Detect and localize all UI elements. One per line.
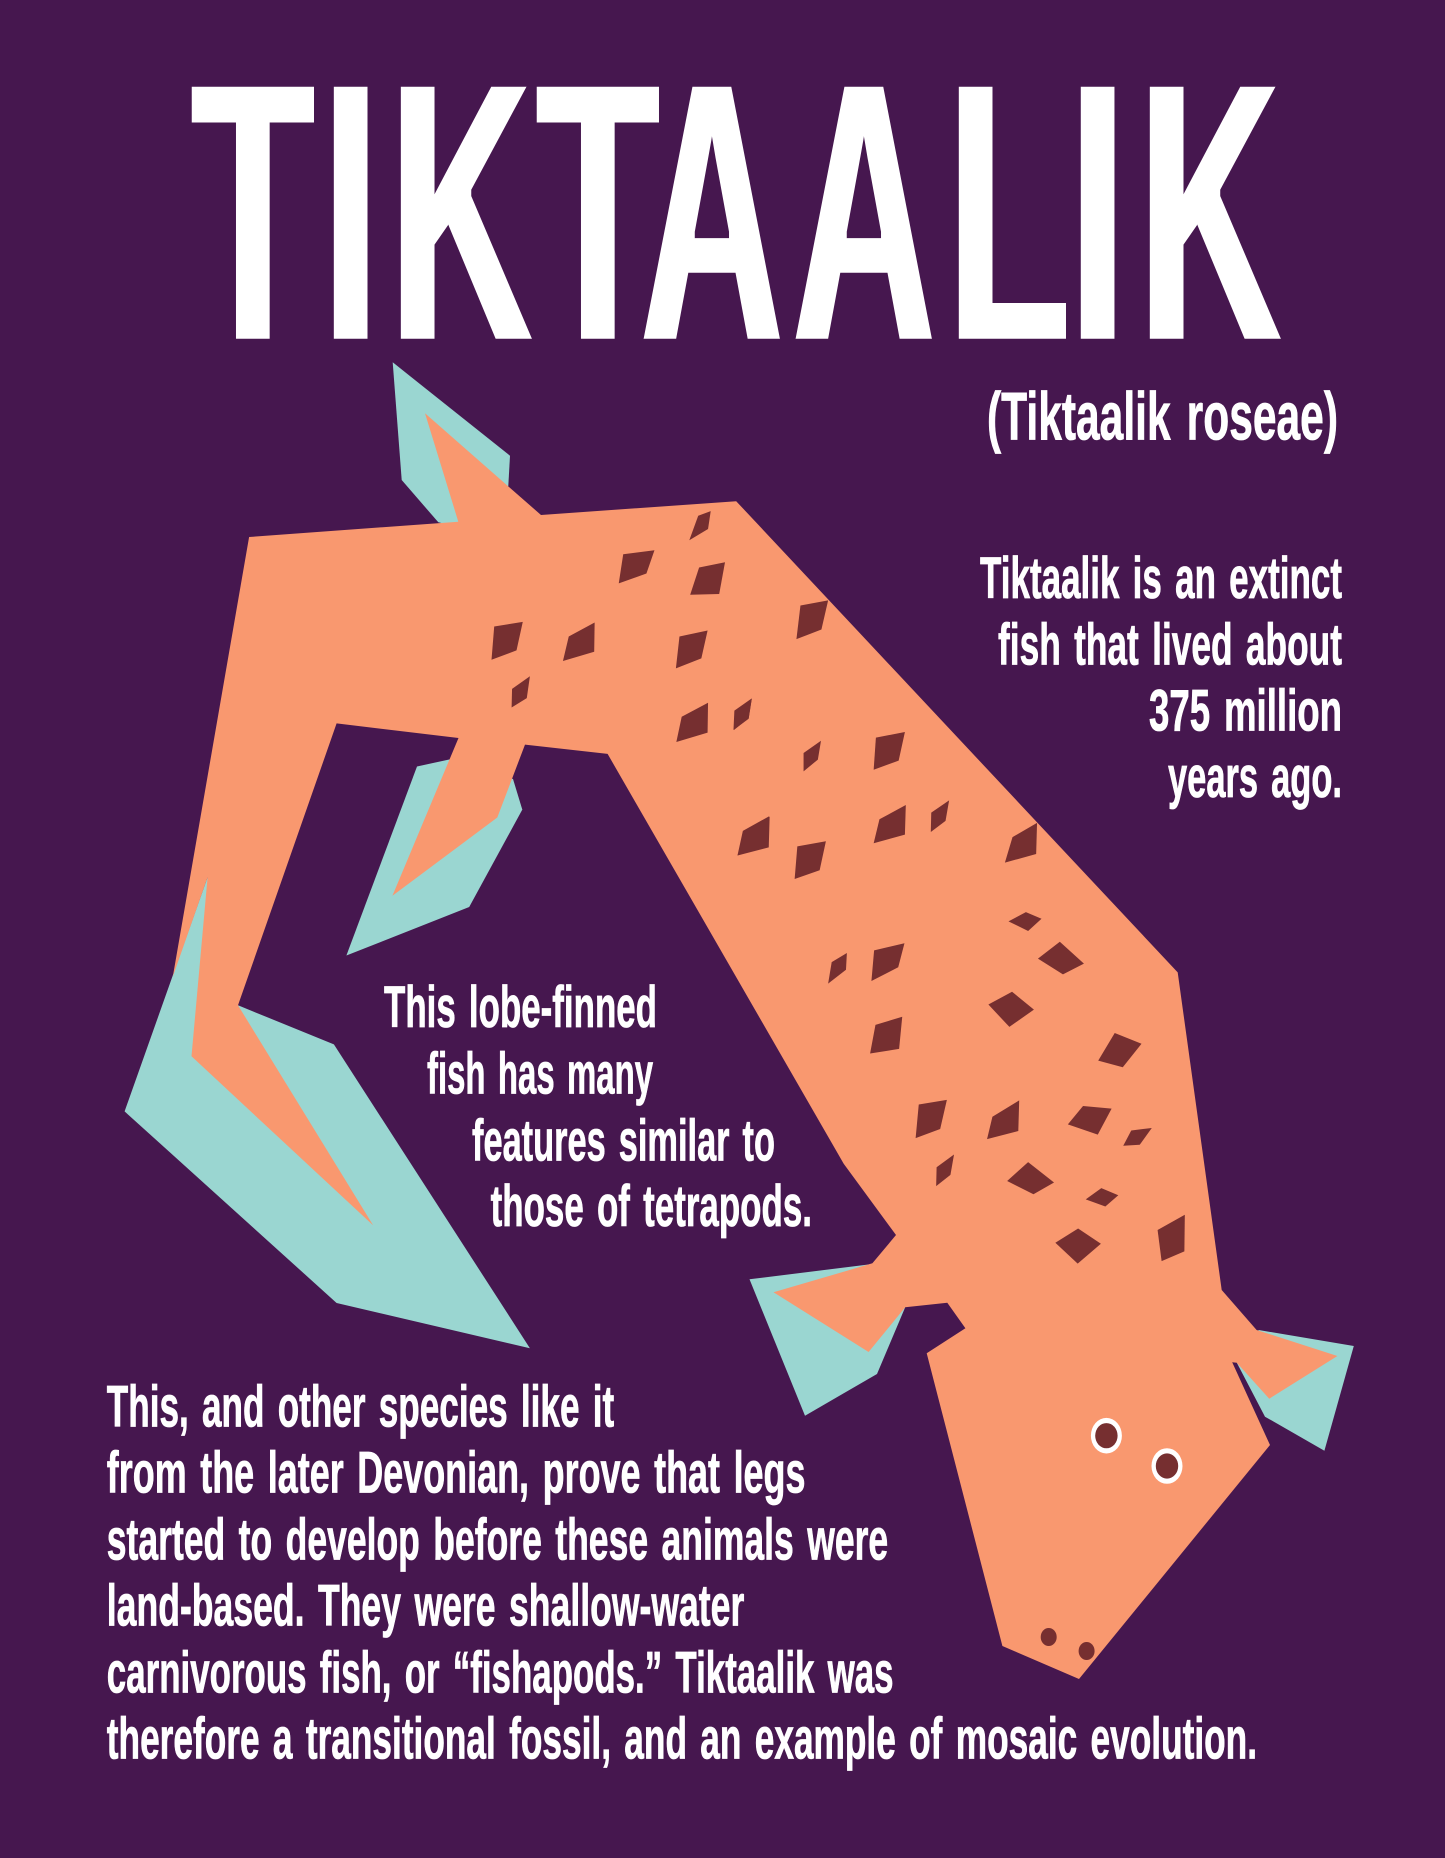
- text block: evolution: started to develop before these animals were: [107, 1507, 888, 1572]
- fin: hind foot: [125, 877, 530, 1348]
- icon: left nostril: [1041, 1628, 1057, 1646]
- text block: lobe-finned: [384, 975, 812, 1239]
- icon: right eye: [1152, 1448, 1182, 1484]
- text block: evolution: This, and other species like it: [107, 1375, 614, 1440]
- icon: left eye: [1091, 1418, 1122, 1453]
- fin: front left: [750, 1264, 905, 1416]
- title: TIKTAALIK: [192, 2, 1283, 422]
- fin: rear lower: [346, 759, 522, 956]
- fin: front right: [1237, 1330, 1354, 1451]
- text block: intro: [980, 546, 1342, 810]
- illustration: tiktaalik: [125, 362, 1354, 1679]
- text block: lobe-finned: those of tetrapods.: [491, 1174, 812, 1239]
- text block: lobe-finned: This lobe-finned: [384, 975, 657, 1040]
- text block: evolution: from the later Devonian, prove that legs: [107, 1441, 806, 1506]
- spots: lower body: [733, 600, 1185, 1264]
- fin: upper back: [393, 362, 510, 530]
- icon: right nostril: [1079, 1642, 1095, 1660]
- text block: evolution: [107, 1375, 1257, 1772]
- text block: evolution: land-based. They were shallow-water: [107, 1574, 744, 1639]
- body: [173, 413, 1337, 1679]
- text block: lobe-finned: fish has many: [427, 1042, 653, 1106]
- text block: evolution: carnivorous fish, or “fishapods.” Tiktaalik was: [107, 1640, 894, 1705]
- spots: upper body: [492, 511, 769, 855]
- text block: lobe-finned: features similar to: [472, 1108, 775, 1174]
